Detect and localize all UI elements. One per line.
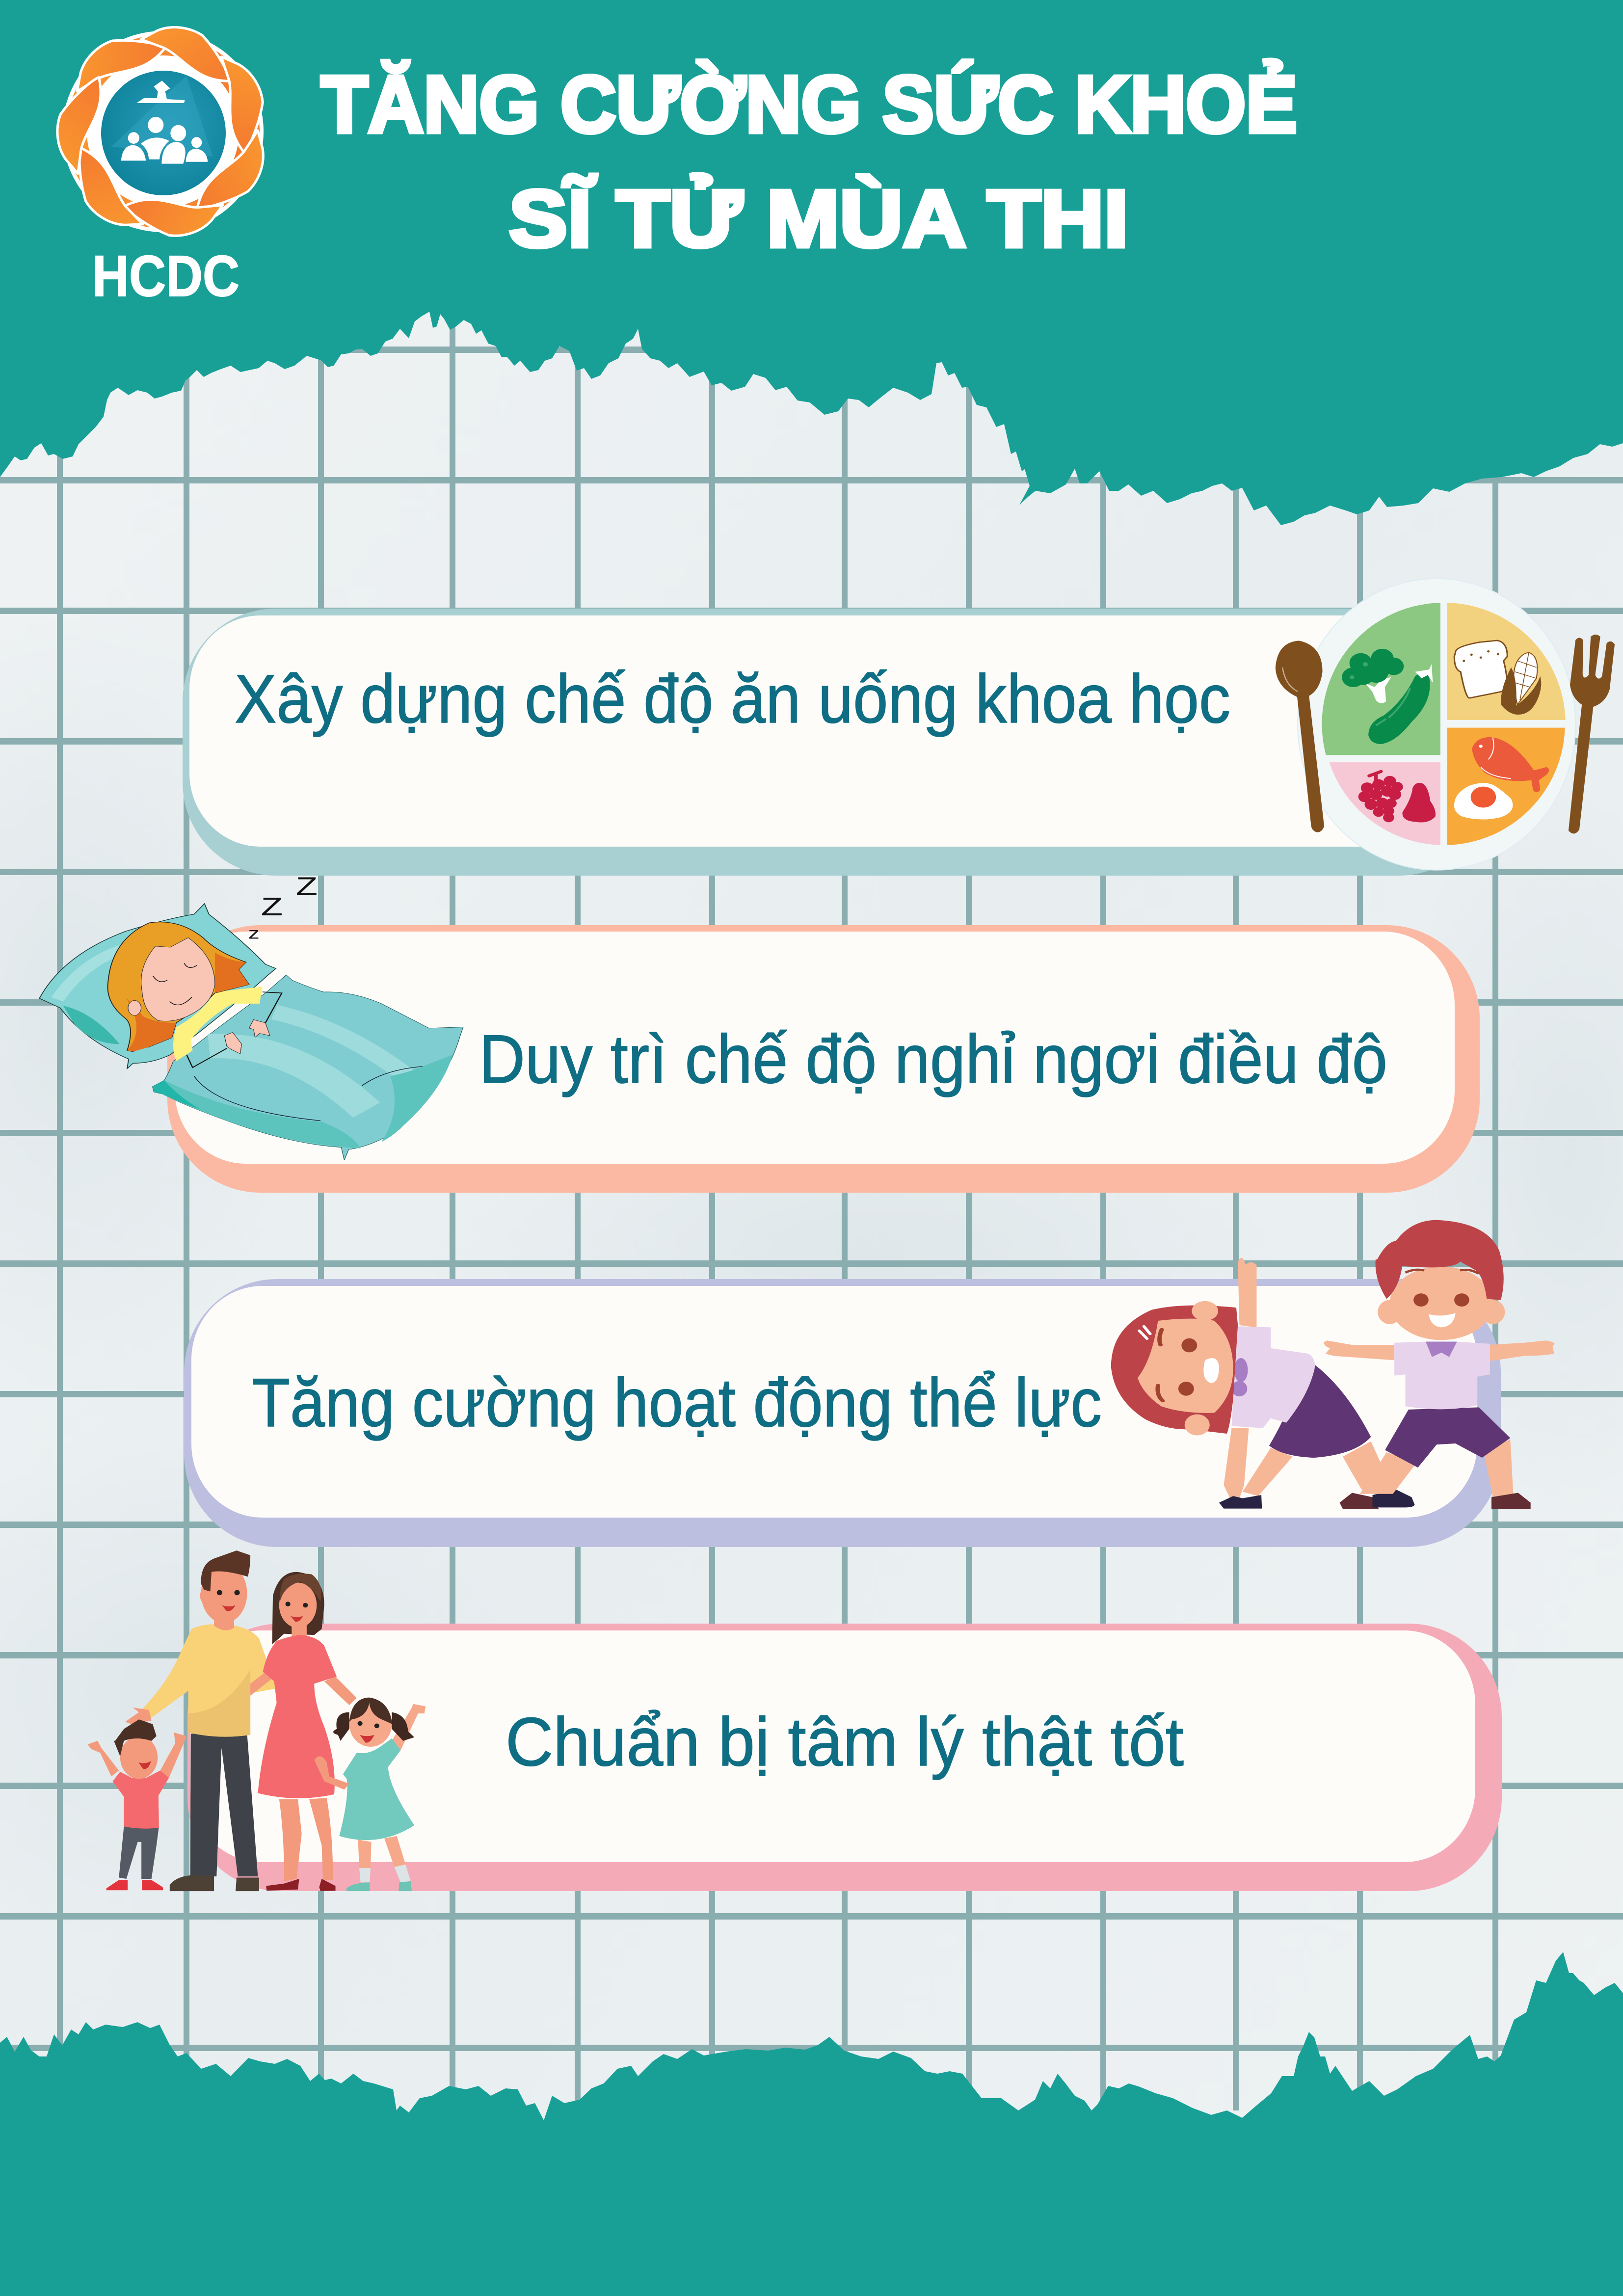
card 4 text: Chuẩn bị tâm lý thật tốt	[506, 1703, 1184, 1780]
face	[128, 937, 215, 1021]
card 4 face	[190, 1630, 1475, 1862]
pillow	[39, 904, 276, 1068]
torn teal band: top	[0, 0, 1623, 525]
bread	[1454, 641, 1507, 698]
logo: orange band	[77, 45, 249, 218]
girl	[1111, 1258, 1415, 1509]
logo: HCDC	[38, 7, 280, 309]
grid lines	[0, 294, 1623, 2110]
logo: white base disc	[62, 31, 264, 232]
plate sections	[1322, 603, 1566, 845]
title line 2: SĨ TỬ MÙA THI	[509, 174, 1128, 264]
card 4: mental	[187, 1624, 1502, 1891]
grapes	[1358, 772, 1403, 822]
card 1 text: Xây dựng chế độ ăn uống khoa học	[235, 660, 1230, 737]
hair	[107, 922, 249, 1051]
mom	[250, 1572, 357, 1891]
logo: people and pagoda	[111, 76, 213, 164]
dad	[125, 1550, 277, 1891]
card 2 face	[175, 932, 1455, 1164]
card 3 backing	[184, 1279, 1501, 1547]
card 2 backing	[167, 925, 1480, 1193]
spoon	[1276, 641, 1324, 832]
title line 1: TĂNG CƯỜNG SỨC KHOẺ	[321, 59, 1297, 149]
torn teal band: bottom	[0, 1952, 1623, 2296]
icon: food plate with spoon and fork	[1276, 579, 1615, 870]
arms and hands	[186, 992, 282, 1068]
blanket	[153, 975, 463, 1160]
card 3 face	[191, 1286, 1477, 1518]
logo wordmark: HCDC	[92, 244, 239, 309]
card 4 backing	[187, 1624, 1502, 1891]
card 2: rest	[167, 925, 1480, 1193]
icon: sleeping girl	[39, 873, 463, 1160]
snore letters: z	[248, 925, 260, 942]
logo: blue circle	[101, 71, 226, 195]
snore letters: Z	[296, 873, 318, 901]
card 1 face	[189, 615, 1465, 847]
son	[87, 1719, 186, 1890]
fork	[1569, 635, 1615, 834]
icon: family	[87, 1550, 426, 1891]
card 2 text: Duy trì chế độ nghỉ ngơi điều độ	[479, 1020, 1387, 1097]
card 3 text: Tăng cường hoạt động thể lực	[252, 1364, 1102, 1441]
corn	[1501, 652, 1541, 715]
card 1 backing	[183, 609, 1492, 876]
fish	[1472, 737, 1549, 792]
rose apple	[1403, 783, 1436, 823]
egg	[1454, 783, 1513, 820]
title	[321, 59, 1297, 264]
boy	[1324, 1220, 1555, 1509]
broccoli	[1342, 649, 1404, 703]
shirt	[173, 987, 263, 1061]
plate	[1298, 579, 1575, 870]
snore letters: Z	[261, 893, 283, 921]
icon: exercising kids	[1111, 1220, 1555, 1509]
card 1: diet	[183, 609, 1492, 876]
daughter	[314, 1698, 426, 1891]
snore letters	[248, 873, 318, 942]
card 3: exercise	[184, 1279, 1501, 1547]
cucumber	[1368, 664, 1433, 744]
logo: ring of orange hands	[38, 7, 280, 251]
